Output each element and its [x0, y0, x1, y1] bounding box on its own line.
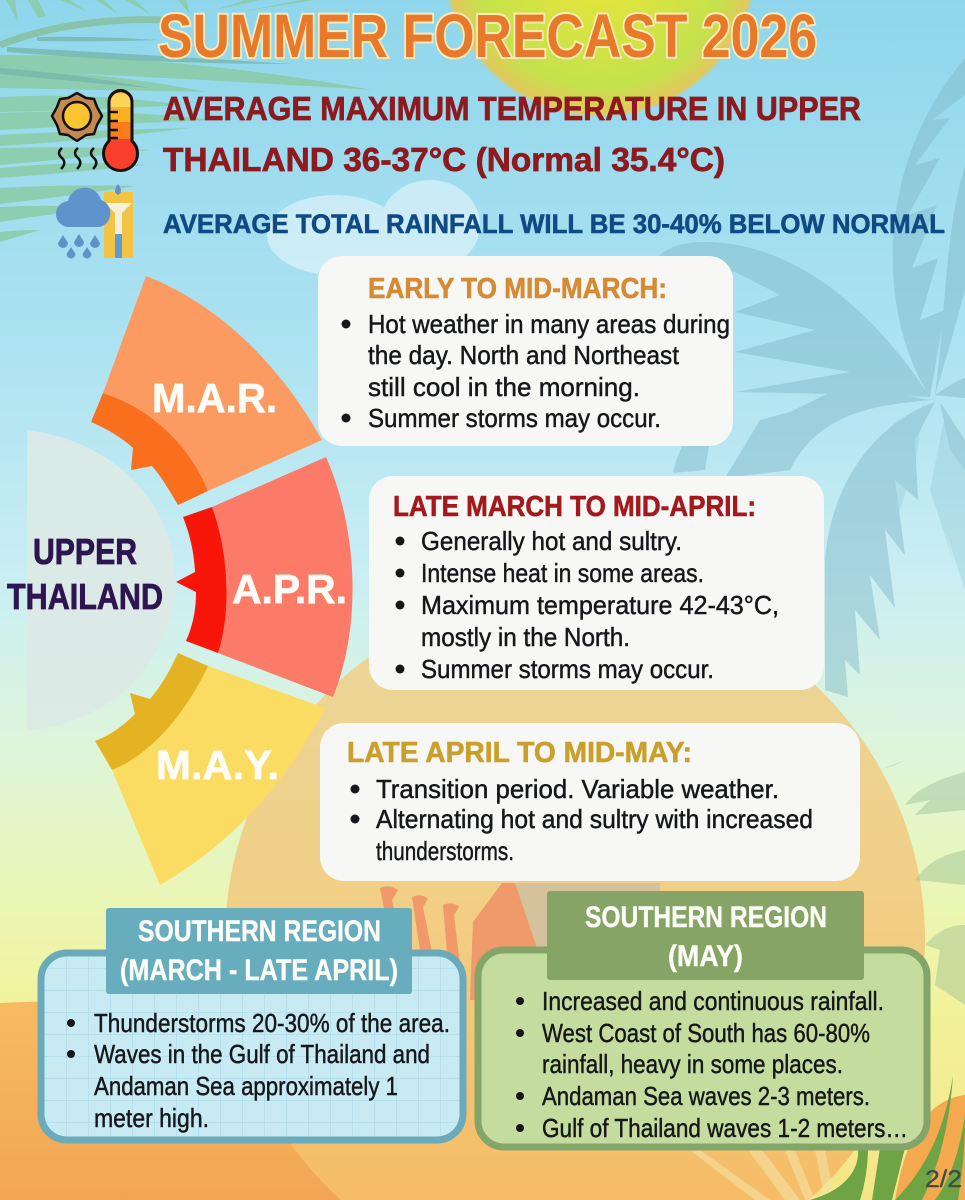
panel: late March to mid-April: Generally hot and sultry. — [421, 526, 682, 556]
panel: southern region May: SOUTHERN REGION — [585, 901, 827, 934]
heading: temperature — [163, 90, 861, 178]
panel: southern region March to late April: meter high. — [94, 1103, 209, 1133]
page number: 2/2 — [925, 1166, 962, 1193]
title: SUMMER FORECAST 2026 — [158, 2, 817, 70]
panel: late April to mid-May: Transition period. Variable weather. — [376, 774, 779, 804]
heading: rainfall: AVERAGE TOTAL RAINFALL WILL BE 30-40% BELOW NORMAL — [163, 209, 945, 239]
panel: late April to mid-May: thunderstorms. — [376, 836, 514, 866]
panel: southern region March to late April: Andaman Sea approximately 1 — [94, 1071, 398, 1101]
background palm silhouette — [655, 58, 965, 697]
hub: upper thailand: UPPER — [33, 531, 137, 572]
panel: southern region March to late April — [41, 908, 463, 1140]
panel: late March to mid-April: LATE MARCH TO MID-APRIL: — [393, 491, 756, 523]
panel: southern region May: rainfall, heavy in some places. — [542, 1049, 843, 1079]
heading: temperature: AVERAGE MAXIMUM TEMPERATURE IN UPPER — [163, 90, 861, 127]
panel: late March to mid-April: Intense heat in some areas. — [421, 558, 704, 588]
sector: April — [176, 457, 353, 697]
panel: late April to mid-May: LATE APRIL TO MID-MAY: — [347, 737, 692, 769]
hub: upper thailand — [7, 430, 175, 730]
panel: late March to mid-April: mostly in the North. — [421, 622, 630, 652]
panel: early to mid-March: Hot weather in many areas during — [368, 309, 730, 339]
sector: May: M.A.Y. — [156, 742, 279, 788]
panel: early to mid-March: Summer storms may occur. — [368, 403, 661, 433]
sector: April: A.P.R. — [232, 566, 347, 612]
heading: temperature: THAILAND 36-37°C (Normal 35.4°C) — [163, 141, 725, 178]
hub: upper thailand: THAILAND — [7, 576, 163, 617]
icon: rain cloud and gauge — [56, 184, 133, 258]
panel: southern region May — [478, 891, 927, 1147]
sector: May — [95, 653, 325, 885]
panel: early to mid-March: still cool in the morning. — [368, 372, 640, 402]
panel: southern region May: (MAY) — [668, 940, 743, 973]
panel: early to mid-March: the day. North and Northeast — [368, 340, 680, 370]
bottom-right green blades — [810, 1075, 965, 1200]
panel: southern region March to late April: SOUTHERN REGION — [138, 915, 381, 948]
top-left palm frond — [0, 0, 373, 242]
sector: March: M.A.R. — [152, 375, 277, 421]
panel: late March to mid-April — [369, 476, 824, 690]
panel: southern region May: Gulf of Thailand waves 1-2 meters… — [542, 1113, 908, 1143]
panel: southern region May: West Coast of South has 60-80% — [542, 1018, 870, 1048]
panel: southern region May: Increased and continuous rainfall. — [542, 986, 884, 1016]
icon: sun and thermometer — [52, 90, 138, 171]
panel: southern region March to late April: (MARCH - LATE APRIL) — [120, 954, 398, 987]
panel: southern region March to late April: Thunderstorms 20-30% of the area. — [94, 1008, 450, 1038]
panel: late March to mid-April: Maximum temperature 42-43°C, — [421, 590, 779, 620]
panel: late April to mid-May — [320, 723, 860, 881]
panel: southern region May: Andaman Sea waves 2-3 meters. — [542, 1081, 870, 1111]
panel: early to mid-March: EARLY TO MID-MARCH: — [368, 273, 667, 305]
panel: late April to mid-May: Alternating hot and sultry with increased — [376, 804, 813, 834]
sector: March — [91, 276, 322, 505]
panel: early to mid-March — [318, 256, 733, 446]
panel: late March to mid-April: Summer storms may occur. — [421, 654, 714, 684]
panel: southern region March to late April: Waves in the Gulf of Thailand and — [94, 1039, 430, 1069]
